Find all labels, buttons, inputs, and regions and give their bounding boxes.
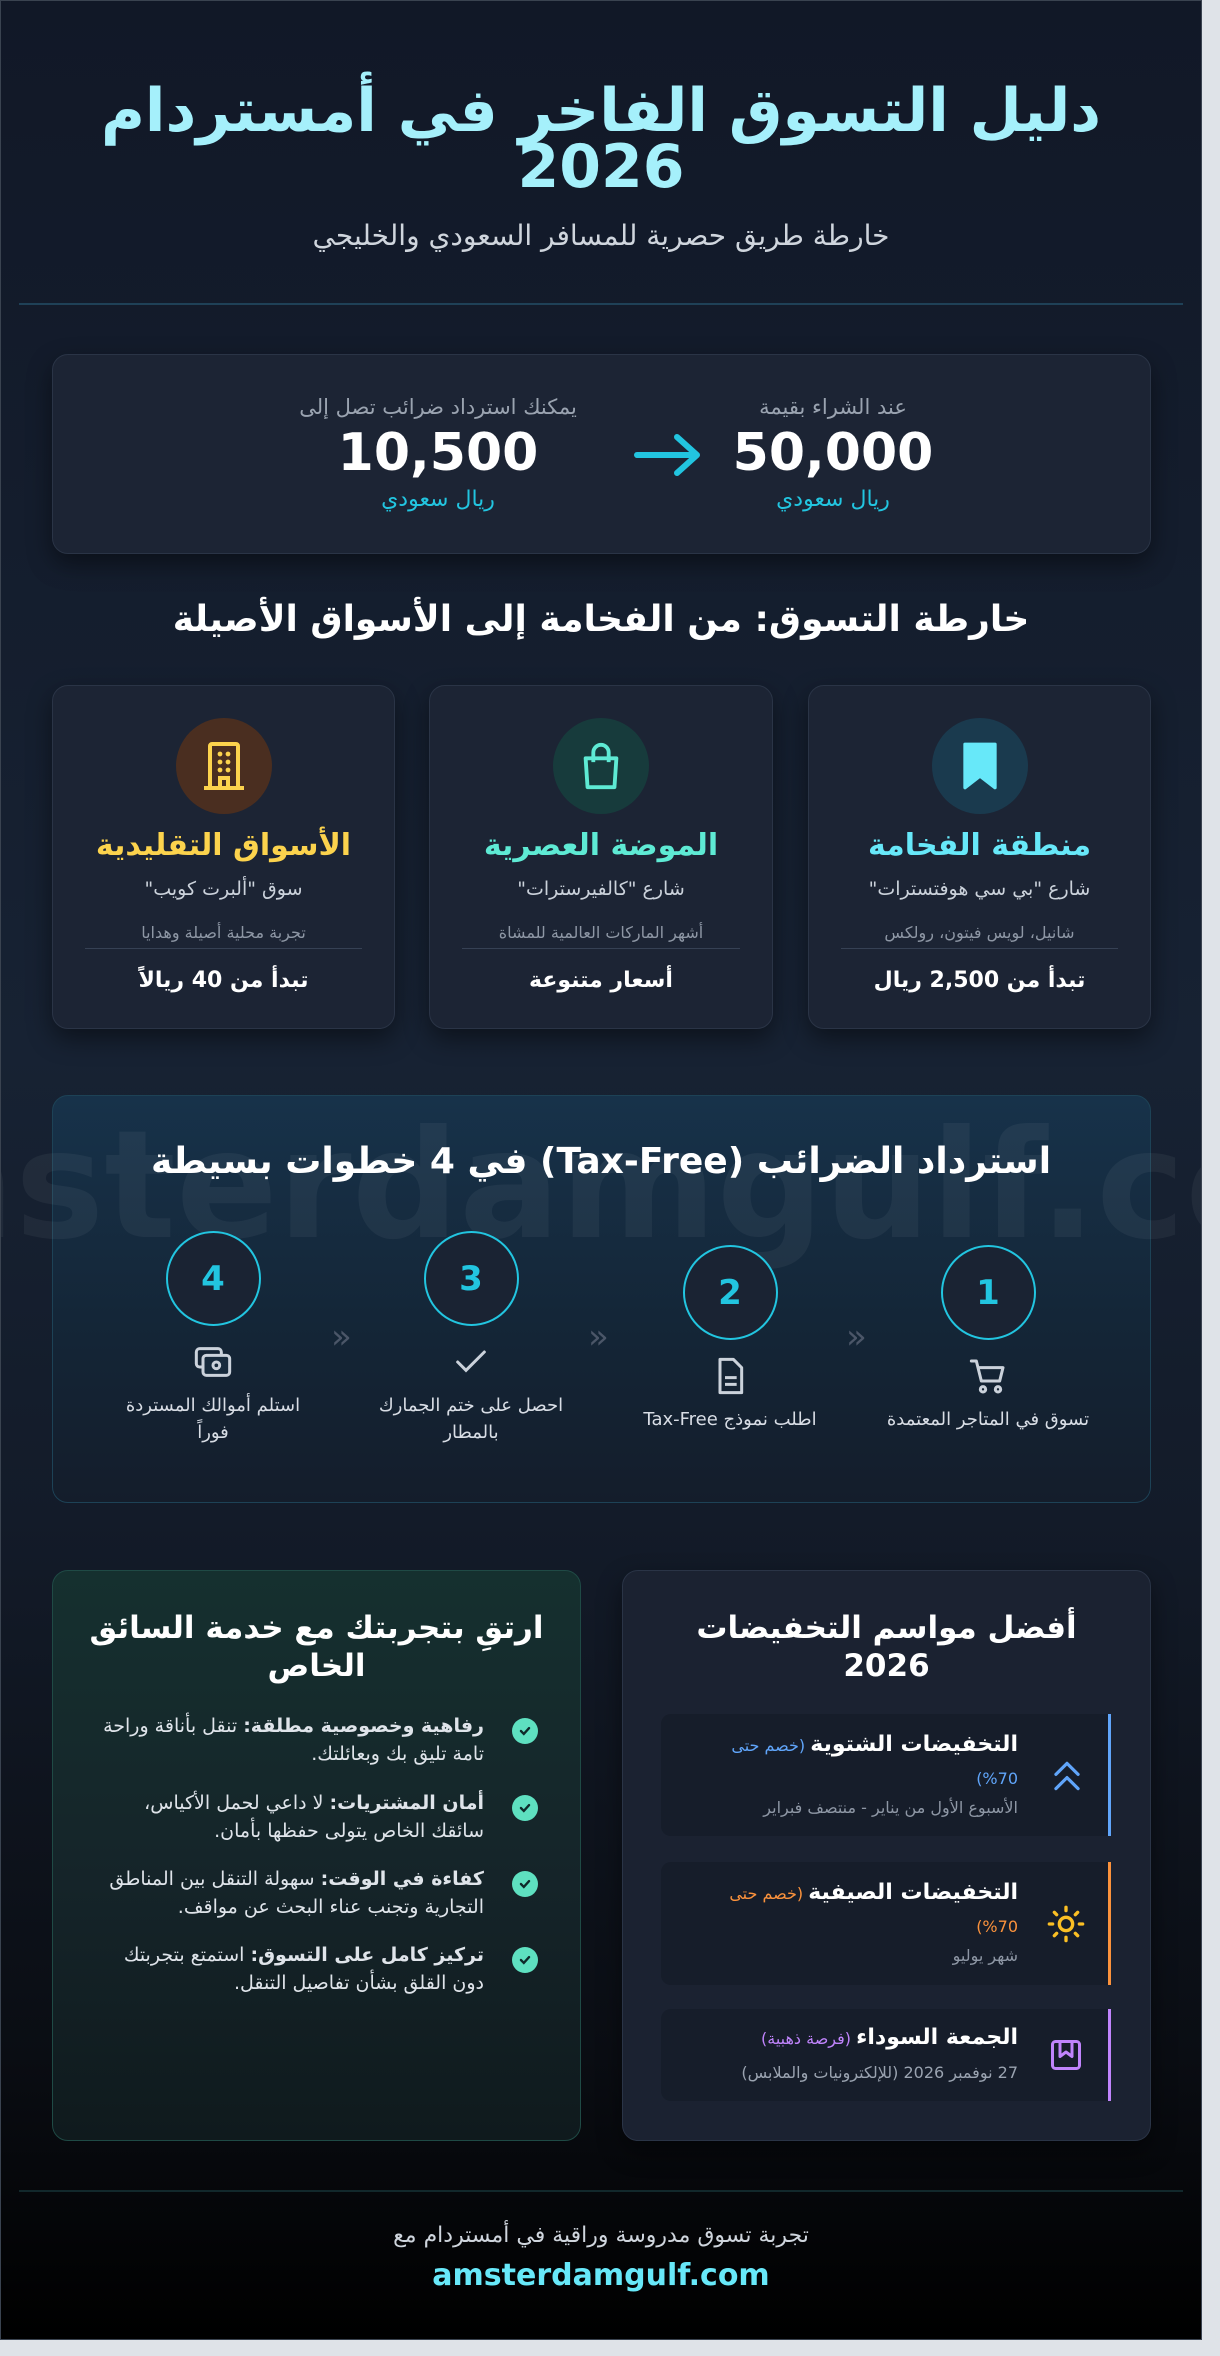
card: traditional markets — [52, 685, 395, 1029]
step 2: اطلب نموذج Tax-Free — [643, 1409, 817, 1430]
icon: check — [456, 1350, 486, 1372]
text: » — [331, 1317, 352, 1357]
driver heading — [90, 1610, 543, 1684]
stat: purchase: ريال سعودي — [776, 487, 890, 512]
step 3: احصل على ختم الجمارك — [379, 1395, 563, 1416]
section heading: خارطة التسوق: من الفخامة إلى الأسواق الأصيلة — [173, 599, 1029, 640]
tax-free heading: استرداد الضرائب (Tax-Free) في 4 خطوات بسيطة — [151, 1141, 1051, 1182]
step 3: بالمطار — [443, 1422, 499, 1443]
card: modern fashion — [429, 685, 773, 1029]
step 2: 2 — [718, 1272, 742, 1312]
season: summer: التخفيضات الصيفية (خصم حتى 70%) — [729, 1880, 1018, 1936]
footer: amsterdamgulf.com — [432, 2258, 770, 2293]
icon: bookmark — [932, 718, 1028, 814]
step 2 — [643, 1245, 817, 1430]
text: » — [846, 1317, 867, 1357]
step 4: فوراً — [197, 1422, 229, 1443]
stat: refund: 10,500 — [338, 423, 538, 483]
seasons heading: أفضل مواسم التخفيضات — [696, 1610, 1077, 1646]
card: luxury: شانيل، لويس فيتون، رولكس — [884, 923, 1075, 942]
card: luxury: منطقة الفخامة — [868, 828, 1091, 863]
panel: sales seasons — [622, 1570, 1151, 2141]
title: دليل التسوق الفاخر في أمستردام — [101, 76, 1101, 146]
icon: cart — [970, 1360, 1004, 1394]
stat: purchase: عند الشراء بقيمة — [759, 395, 907, 419]
icon: sun — [1048, 1906, 1084, 1942]
bullet 4: تركيز كامل على التسوق: استمتع بتجربتك دون القلق بشأن تفاصيل التنقل. — [124, 1944, 484, 1994]
stat: purchase: 50,000 — [733, 423, 933, 483]
icon: building — [176, 718, 272, 814]
card: traditional markets: تجربة محلية أصيلة وهدايا — [141, 923, 306, 942]
season: black friday — [661, 2009, 1111, 2101]
stat: purchase — [733, 395, 933, 512]
step 4 — [126, 1231, 300, 1443]
card: modern fashion: أشهر الماركات العالمية للمشاة — [499, 923, 703, 942]
step 1: تسوق في المتاجر المعتمدة — [887, 1409, 1089, 1430]
title: 2026 — [518, 132, 684, 202]
season: black friday: الجمعة السوداء (فرصة ذهبية) — [761, 2025, 1018, 2050]
card: modern fashion: الموضة العصرية — [484, 828, 718, 863]
season: summer — [661, 1862, 1111, 1985]
season: summer: شهر يوليو — [953, 1946, 1018, 1965]
icon: shopping bag — [553, 718, 649, 814]
card: traditional markets: تبدأ من 40 ريالاً — [138, 968, 309, 993]
card: luxury: تبدأ من 2,500 ريال — [874, 968, 1085, 993]
driver heading: الخاص — [268, 1648, 365, 1684]
title — [101, 72, 1101, 202]
footer: تجربة تسوق مدروسة وراقية في أمستردام مع — [393, 2223, 809, 2248]
season: winter — [661, 1714, 1111, 1836]
card: luxury — [808, 685, 1151, 1029]
subtitle: خارطة طريق حصرية للمسافر السعودي والخليجي — [313, 219, 889, 252]
bullet 3: كفاءة في الوقت: سهولة التنقل بين المناطق التجارية وتجنب عناء البحث عن مواقف. — [109, 1868, 484, 1918]
step 4: 4 — [201, 1258, 225, 1298]
step 3: 3 — [459, 1258, 483, 1298]
icon: chevrons up — [1054, 1762, 1080, 1790]
step 4: استلم أموالك المستردة — [126, 1395, 300, 1416]
bullet 2: أمان المشتريات: لا داعي لحمل الأكياس، سائقك الخاص يتولى حفظها بأمان. — [144, 1792, 484, 1842]
card: modern fashion: أسعار متنوعة — [529, 968, 673, 993]
icon: bookmark box — [1051, 2040, 1081, 2070]
card: modern fashion: شارع "كالفيرسترات" — [517, 878, 685, 900]
arrow — [634, 434, 700, 476]
step 1 — [887, 1245, 1089, 1430]
driver heading: ارتقِ بتجربتك مع خدمة السائق — [90, 1610, 543, 1646]
stat box — [52, 354, 1151, 554]
bullet 1: رفاهية وخصوصية مطلقة: تنقل بأناقة وراحة تامة تليق بك وبعائلتك. — [103, 1715, 484, 1765]
card: luxury: شارع "بي سي هوفتسترات" — [869, 878, 1090, 900]
panel: tax-free steps — [52, 1095, 1151, 1503]
card: traditional markets: سوق "ألبرت كويب" — [144, 878, 302, 900]
season: winter: التخفيضات الشتوية (خصم حتى 70%) — [731, 1732, 1018, 1788]
stat: refund: ريال سعودي — [381, 487, 495, 512]
icon: document — [718, 1358, 744, 1394]
stat: refund: يمكنك استرداد ضرائب تصل إلى — [299, 395, 577, 419]
icon: money — [194, 1347, 232, 1377]
panel: private driver — [52, 1570, 581, 2141]
seasons heading — [696, 1607, 1077, 1684]
stat: refund — [299, 395, 577, 512]
footer — [393, 2220, 809, 2293]
text: » — [588, 1317, 609, 1357]
step 3 — [379, 1231, 563, 1443]
seasons heading: 2026 — [843, 1648, 930, 1684]
step 1: 1 — [976, 1272, 1000, 1312]
season: black friday: 27 نوفمبر 2026 (للإلكترونيات والملابس) — [741, 2063, 1018, 2082]
season: winter: الأسبوع الأول من يناير - منتصف فبراير — [763, 1798, 1018, 1817]
card: traditional markets: الأسواق التقليدية — [96, 828, 351, 863]
